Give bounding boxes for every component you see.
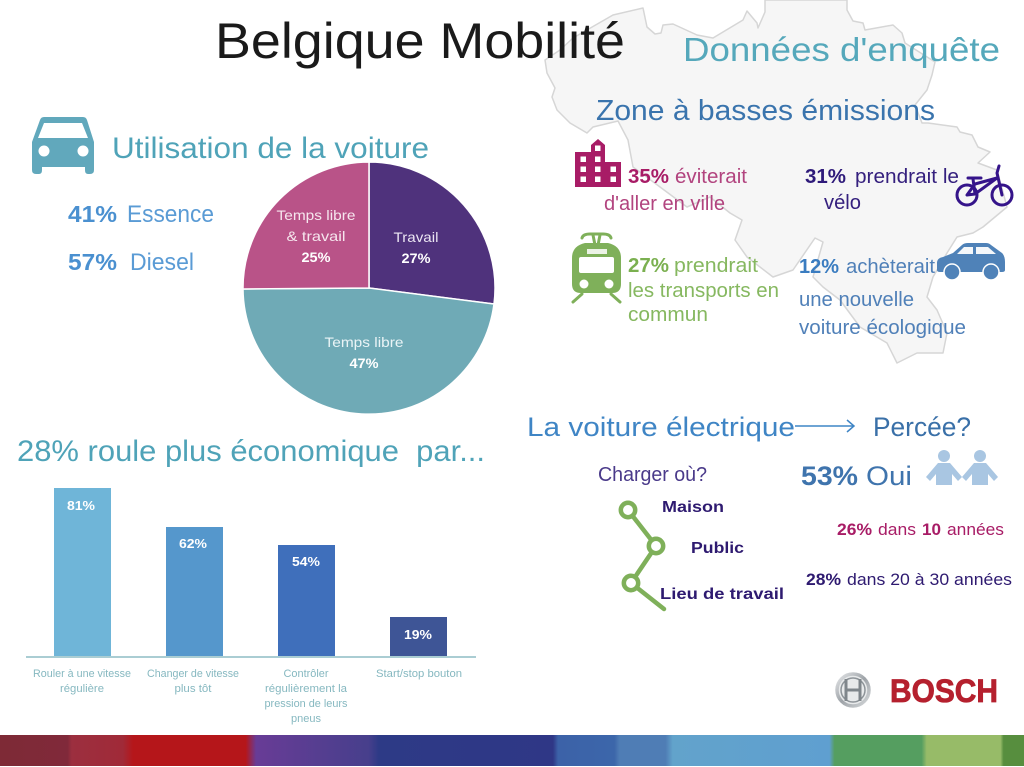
icon: tram	[572, 234, 621, 302]
charging route line	[621, 503, 664, 609]
text: new ecological car: achèterait	[846, 256, 935, 278]
stat: diesel	[68, 249, 194, 276]
text: cycling: vélo	[824, 192, 861, 214]
text: new ecological car: une nouvelle	[799, 289, 914, 311]
icon: two people	[926, 450, 998, 485]
stat: 53% yes: Oui	[866, 461, 912, 491]
icon: building	[575, 139, 621, 187]
bar labels: plus tôt	[174, 683, 212, 695]
text: public transport	[628, 255, 779, 326]
heading: breakthrough: Percée?	[873, 412, 971, 442]
text: avoid city: éviterait	[675, 166, 747, 188]
icon: car side	[937, 243, 1005, 280]
stat: petrol	[68, 201, 214, 228]
pie labels: Travail	[394, 229, 438, 245]
bar chart	[26, 488, 476, 725]
bar labels: pression de leurs	[264, 698, 348, 710]
text: new ecological car	[799, 256, 966, 339]
charging locations: Lieu de travail	[660, 586, 784, 603]
text: avoid city: d'aller en ville	[604, 193, 725, 215]
bar: steady speed 81%	[54, 488, 111, 657]
bar: shift gears earlier 62%	[166, 527, 223, 657]
panel: economical driving	[17, 435, 485, 725]
pie labels	[276, 207, 438, 371]
text: public transport: les transports en	[628, 280, 779, 302]
panel: electric car	[527, 412, 1012, 609]
bar: start/stop 19%	[390, 617, 447, 657]
stat: 26% in 10 years: 10	[922, 520, 941, 539]
pie chart	[243, 162, 495, 414]
text: avoid city	[604, 166, 747, 215]
colour strip	[0, 735, 1024, 766]
text: public transport: commun	[628, 304, 708, 326]
slice: free time 47%	[243, 288, 494, 414]
text: avoid city: 35%	[628, 166, 669, 188]
pie labels: & travail	[286, 228, 346, 244]
pie labels: 25%	[302, 249, 331, 265]
pie labels: Temps libre	[276, 207, 356, 223]
heading: where to charge: Charger où?	[598, 464, 707, 486]
bar: shift gears earlier 62%: 62%	[179, 536, 207, 551]
panel: low emission zone	[572, 95, 1012, 339]
stat: 26% in 10 years: dans	[878, 520, 916, 539]
bar: steady speed 81%: 81%	[67, 498, 95, 513]
bar labels: pneus	[291, 713, 321, 725]
text: cycling: prendrait le	[855, 166, 959, 188]
stat: 26% in 10 years: 26%	[837, 520, 872, 539]
logo: Bosch	[837, 673, 998, 709]
icon: bicycle	[957, 166, 1012, 205]
map of Belgium	[545, 0, 1007, 363]
title: Belgique Mobilité	[215, 13, 625, 69]
bar: start/stop 19%: 19%	[404, 627, 432, 642]
text: cycling: 31%	[805, 166, 846, 188]
stat: 26% in 10 years: années	[947, 520, 1004, 539]
stat: petrol: Essence	[127, 201, 214, 228]
heading: low emission zone: Zone à basses émissions	[596, 95, 935, 127]
arrow	[795, 420, 854, 432]
slice: work 27%	[369, 162, 495, 304]
stat: diesel: 57%	[68, 249, 117, 275]
pie labels: 47%	[350, 355, 379, 371]
bar labels: Contrôler	[284, 668, 329, 680]
bar: tyre pressure 54%	[278, 545, 335, 657]
heading: electric car: La voiture électrique	[527, 412, 795, 442]
text: cycling	[805, 166, 959, 214]
charging locations: Maison	[662, 499, 724, 516]
stat: 28% in 20 to 30 years: 28%	[806, 570, 841, 589]
pie labels: Temps libre	[324, 334, 404, 350]
heading: survey data: Données d'enquête	[683, 31, 1000, 68]
text: public transport: 27%	[628, 255, 669, 277]
stat: diesel: Diesel	[130, 249, 194, 276]
bar labels: régulière	[60, 683, 104, 695]
heading: car usage: Utilisation de la voiture	[112, 132, 429, 165]
bar labels: Changer de vitesse	[147, 668, 239, 680]
pie labels: 27%	[402, 250, 431, 266]
panel: car usage	[32, 117, 495, 414]
charging locations	[660, 499, 784, 603]
bar labels: Start/stop bouton	[376, 668, 462, 680]
heading: economical driving: 28% roule plus économique par...	[17, 435, 485, 468]
slice: free time and work 25%	[243, 162, 369, 289]
stat: 26% in 10 years	[837, 520, 1004, 539]
logo: Bosch: BOSCH	[890, 673, 998, 709]
stat: 28% in 20 to 30 years: dans 20 à 30 années	[847, 570, 1012, 589]
bar labels: Rouler à une vitesse	[33, 668, 131, 680]
stat: 53% yes	[801, 461, 912, 491]
text: new ecological car: voiture écologique	[799, 317, 966, 339]
text: public transport: prendrait	[674, 255, 758, 277]
stat: 53% yes: 53%	[801, 461, 858, 491]
bar labels: régulièrement la	[265, 683, 348, 695]
icon: car front	[32, 117, 94, 174]
bar: tyre pressure 54%: 54%	[292, 554, 320, 569]
stat: petrol: 41%	[68, 201, 117, 227]
bar labels	[33, 668, 462, 725]
charging locations: Public	[691, 540, 744, 557]
text: new ecological car: 12%	[799, 256, 839, 278]
